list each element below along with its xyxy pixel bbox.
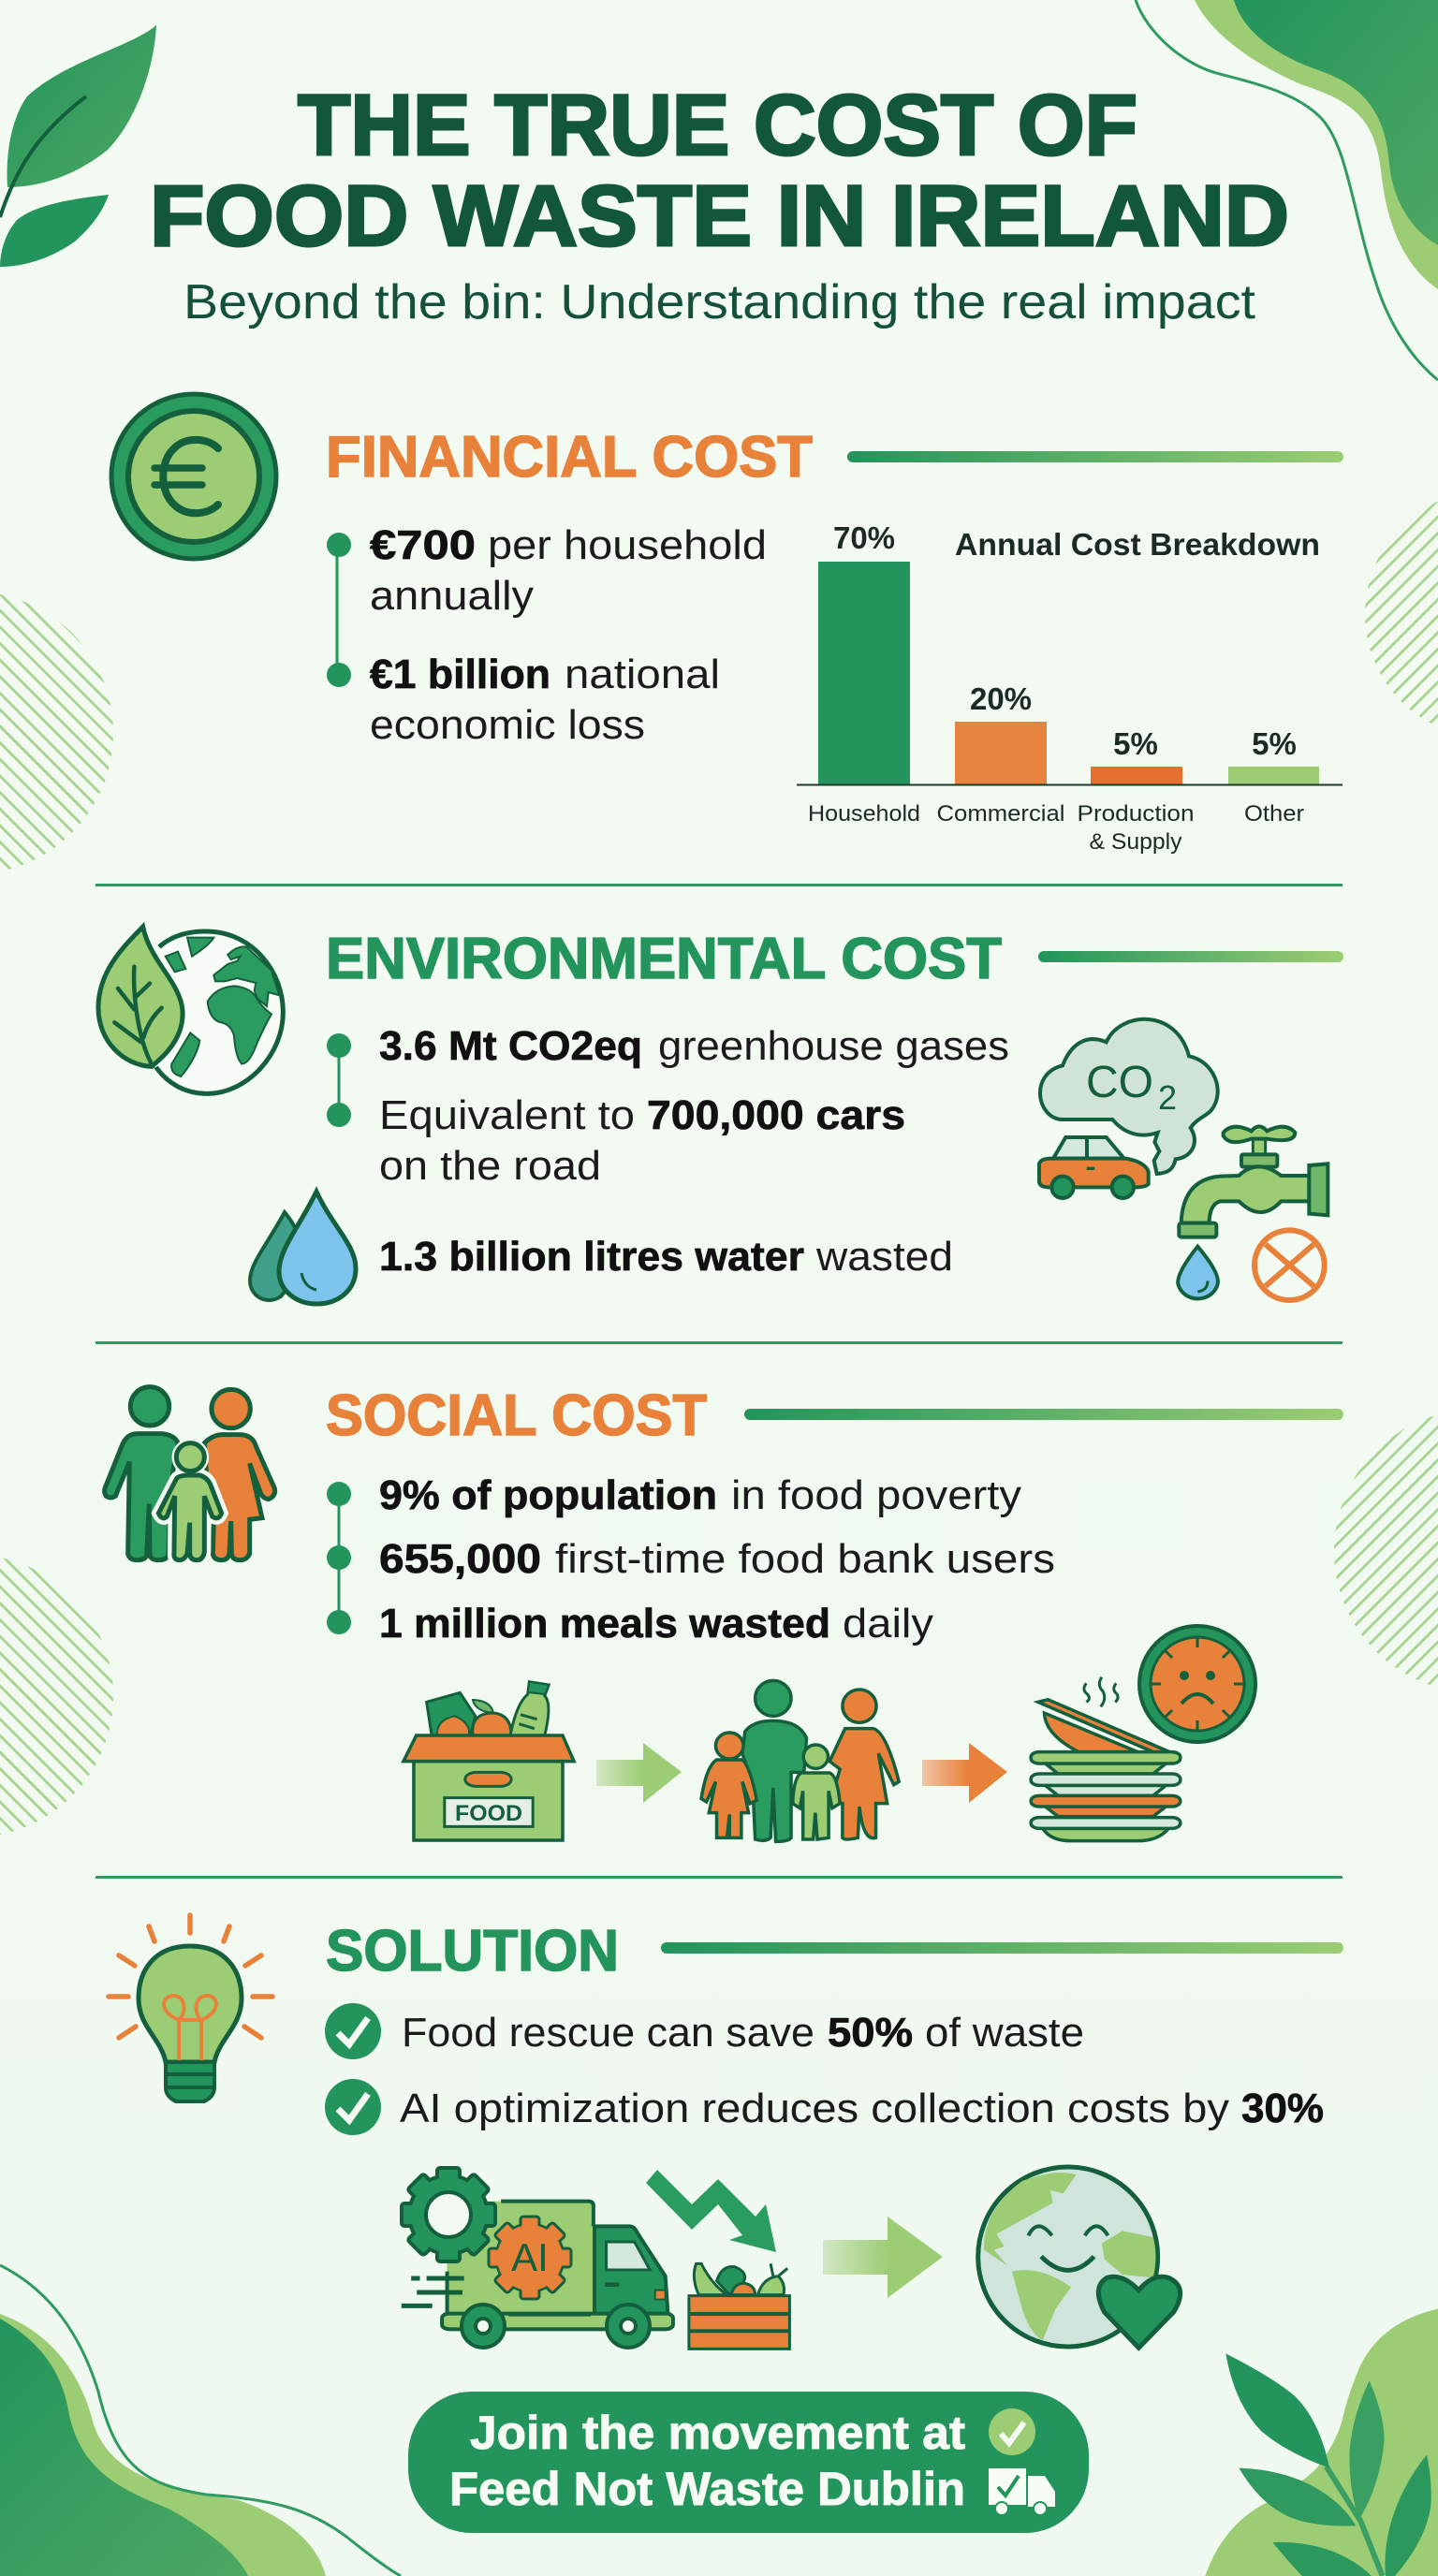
item: AI optimization: 30% xyxy=(1241,2086,1324,2131)
stat: cars equivalent: Equivalent to xyxy=(379,1092,635,1138)
icon: CO2 cloud, car and tap: CO xyxy=(1086,1058,1153,1107)
bar chart: annual cost breakdown: 5% xyxy=(1252,726,1297,761)
subtitle: Beyond the bin: Understanding the real impact xyxy=(183,275,1256,329)
panel: social cost xyxy=(105,1383,1343,1841)
stat: national loss: €1 billion xyxy=(370,651,550,697)
icon: leaf and globe xyxy=(98,927,283,1093)
bar chart: annual cost breakdown: Commercial xyxy=(936,801,1065,827)
call to action text xyxy=(449,2407,965,2515)
stat: food bank users: first-time food bank users xyxy=(555,1536,1055,1582)
heading rule xyxy=(1038,951,1343,962)
icon: AI truck xyxy=(402,2168,673,2348)
item: food rescue: of waste xyxy=(925,2010,1084,2056)
title: THE TRUE COST OF xyxy=(298,78,1137,173)
stat: cars equivalent: on the road xyxy=(379,1143,601,1189)
icon: check badge xyxy=(989,2408,1035,2455)
stat: national loss: economic loss xyxy=(370,702,645,748)
bar chart: annual cost breakdown: 20% xyxy=(970,681,1032,716)
stat: household cost xyxy=(370,522,767,619)
stat: food poverty: 9% of population xyxy=(379,1472,717,1518)
decoration: striped circles xyxy=(0,490,1438,1837)
stat: water wasted: wasted xyxy=(815,1234,953,1280)
heading rule xyxy=(847,451,1343,462)
stat: household cost: per household xyxy=(488,522,767,568)
panel: environmental cost xyxy=(98,927,1343,1304)
heading rule xyxy=(744,1409,1343,1420)
stat: cars equivalent xyxy=(379,1092,905,1189)
title xyxy=(150,78,1289,264)
call to action pill xyxy=(408,2392,1089,2533)
arrow: decreasing zigzag xyxy=(646,2170,776,2252)
bar chart: annual cost breakdown: Production xyxy=(1077,801,1195,827)
heading: social cost: SOCIAL COST xyxy=(326,1383,707,1448)
timeline bullets xyxy=(327,533,351,687)
icon: family xyxy=(105,1387,275,1560)
item: food rescue: Food rescue can save xyxy=(402,2010,814,2056)
heading: solution: SOLUTION xyxy=(326,1919,619,1983)
heading rule xyxy=(661,1942,1343,1954)
bar chart: annual cost breakdown: Annual Cost Breakdown xyxy=(955,527,1320,562)
icon: smiling earth with heart xyxy=(978,2167,1181,2348)
timeline bullets xyxy=(327,1033,351,1127)
heading: environmental cost: ENVIRONMENTAL COST xyxy=(326,927,1002,991)
item: food rescue: 50% xyxy=(828,2010,913,2056)
icon: euro coin xyxy=(111,394,276,559)
icon: AI truck: AI xyxy=(511,2235,549,2279)
stat: food bank users: 655,000 xyxy=(379,1536,541,1582)
heading: financial cost: FINANCIAL COST xyxy=(326,425,813,490)
gear xyxy=(402,2168,495,2261)
stat: national loss xyxy=(370,651,720,748)
icon: food box: FOOD xyxy=(455,1801,522,1826)
stat: national loss: national xyxy=(565,651,720,697)
stat: food poverty xyxy=(379,1472,1021,1518)
item: AI optimization xyxy=(325,2079,1324,2135)
decoration: bottom left blobs xyxy=(0,2265,401,2576)
decoration: bottom right leaves xyxy=(1205,2309,1438,2576)
item: AI optimization: AI optimization reduces collection costs by xyxy=(400,2086,1229,2131)
bar chart: annual cost breakdown: Household xyxy=(808,801,920,827)
arrow: truck to earth xyxy=(823,2217,943,2298)
stat: meals wasted: daily xyxy=(843,1601,933,1647)
bar chart: annual cost breakdown: 5% xyxy=(1113,726,1158,761)
icon: vegetable crate xyxy=(689,2263,789,2349)
icon: CO2 cloud, car and tap xyxy=(1039,1019,1328,1300)
stat: food poverty: in food poverty xyxy=(731,1472,1021,1518)
bar chart: annual cost breakdown: & Supply xyxy=(1090,829,1181,855)
AI gear xyxy=(489,2217,571,2299)
icon: water drops xyxy=(250,1192,356,1304)
title: FOOD WASTE IN IRELAND xyxy=(150,168,1289,264)
icon: sad clock xyxy=(1139,1626,1255,1742)
arrow: family to plates xyxy=(922,1743,1007,1803)
stat: greenhouse gases xyxy=(379,1023,1009,1069)
decoration: top left leaves xyxy=(0,25,156,267)
icon: CO2 cloud, car and tap: 2 xyxy=(1158,1078,1177,1117)
arrow: food box to family xyxy=(596,1743,682,1803)
stat: meals wasted: 1 million meals wasted xyxy=(379,1601,830,1647)
stat: greenhouse gases: 3.6 Mt CO2eq xyxy=(379,1023,642,1069)
bar chart: annual cost breakdown xyxy=(797,520,1343,855)
stat: household cost: annually xyxy=(370,573,534,619)
icon: food box xyxy=(404,1682,574,1840)
stat: greenhouse gases: greenhouse gases xyxy=(658,1023,1009,1069)
stat: food bank users xyxy=(379,1536,1055,1582)
panel: financial cost xyxy=(111,394,1343,855)
call to action text: Join the movement at xyxy=(470,2407,965,2459)
decoration: top right blobs xyxy=(1136,0,1438,380)
stat: household cost: €700 xyxy=(370,522,476,568)
stat: water wasted: 1.3 billion litres water xyxy=(379,1234,804,1280)
truck wheels xyxy=(462,2305,650,2348)
timeline bullets xyxy=(327,1482,351,1634)
icon: light bulb xyxy=(109,1915,272,2101)
panel: solution xyxy=(109,1915,1343,2349)
icon: delivery truck xyxy=(989,2468,1055,2515)
bar chart: annual cost breakdown: Other xyxy=(1244,801,1304,827)
item: food rescue xyxy=(325,2003,1084,2059)
icon: wasted plates xyxy=(1031,1677,1181,1841)
bar chart: annual cost breakdown: 70% xyxy=(833,520,895,555)
icon: family group xyxy=(701,1680,899,1841)
call to action text: Feed Not Waste Dublin xyxy=(449,2463,965,2515)
stat: cars equivalent: 700,000 cars xyxy=(647,1092,905,1138)
